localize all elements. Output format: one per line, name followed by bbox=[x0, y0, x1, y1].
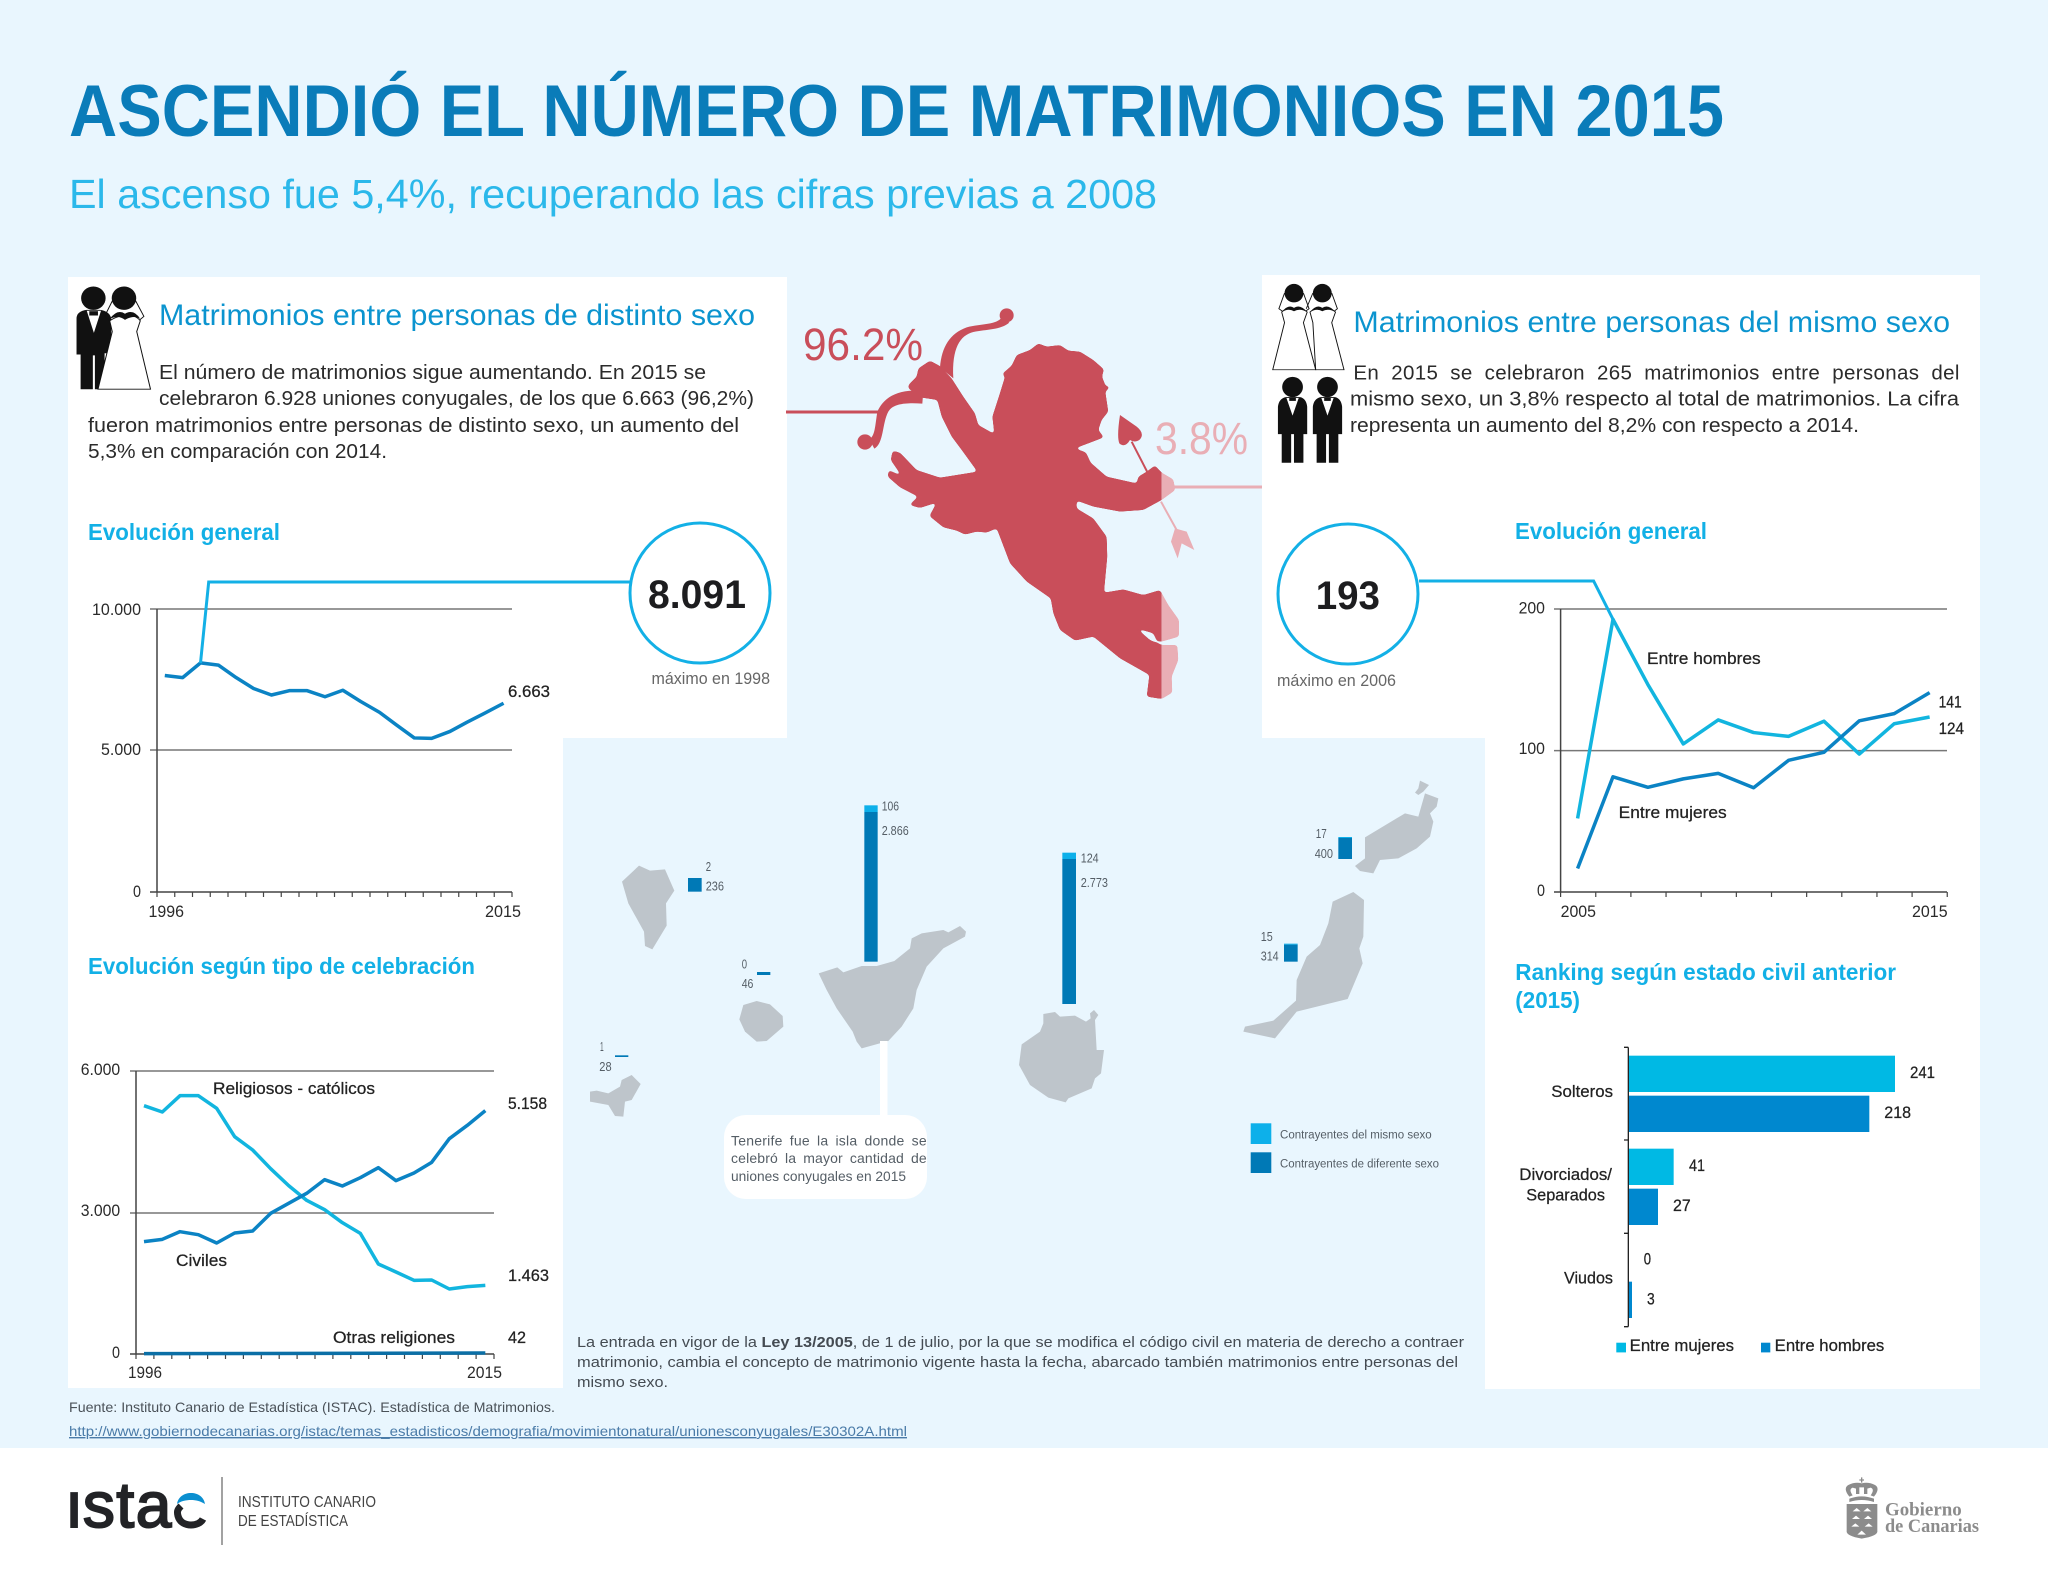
text block: Ley 13/2005: matrimonio, cambia el concepto de matrimonio vigente hasta la fecha, abarcado también matrimonios entre personas del bbox=[577, 1354, 1458, 1371]
island values: 46 bbox=[742, 977, 753, 991]
legend: ranking bbox=[1616, 1337, 1884, 1355]
text block: representa un aumento del 8,2% con respecto a 2014. bbox=[1350, 414, 1859, 437]
line chart: tipo de celebración: 0 bbox=[112, 1343, 120, 1362]
line chart: evolución general distinto sexo: 5.000 bbox=[101, 740, 141, 759]
text block: Ley 13/2005: La entrada en vigor de la Ley 13/2005 , de 1 de julio, por la que se modifica el código civil en materia de derecho a contraer bbox=[577, 1334, 1464, 1351]
text block: En 2015 se celebraron 265 matrimonios entre personas del bbox=[1353, 361, 1959, 384]
line chart: evolución general mismo sexo: Entre mujeres bbox=[1619, 804, 1727, 822]
footer band bbox=[0, 1448, 2048, 1586]
island values: 106 bbox=[882, 800, 899, 814]
line chart: evolución general distinto sexo: 10.000 bbox=[92, 600, 141, 619]
callout line and circle: máximo 2006: máximo en 2006 bbox=[1277, 671, 1396, 690]
line chart: evolución general mismo sexo: 124 bbox=[1939, 720, 1964, 738]
panel: matrimonios entre personas de distinto sexo bbox=[77, 286, 755, 463]
text block: mismo sexo, un 3,8% respecto al total de matrimonios. La cifra bbox=[1350, 388, 1960, 410]
line chart: evolución general mismo sexo: 2015 bbox=[1912, 902, 1948, 921]
panel: mismo sexo background bbox=[1262, 275, 1980, 1389]
bar chart: ranking estado civil: 0 bbox=[1644, 1251, 1651, 1269]
bar chart: ranking estado civil: 241 bbox=[1910, 1064, 1935, 1082]
logo: ISTAC bbox=[64, 1469, 376, 1545]
bar chart: ranking estado civil: 3 bbox=[1647, 1290, 1655, 1308]
legend: map: Contrayentes del mismo sexo bbox=[1280, 1129, 1432, 1141]
legend: ranking: Entre mujeres bbox=[1630, 1337, 1734, 1355]
line chart: tipo de celebración: 5.158 bbox=[508, 1095, 547, 1113]
bar chart: ranking estado civil: Separados bbox=[1526, 1187, 1605, 1205]
line chart: evolución general mismo sexo: 0 bbox=[1537, 881, 1545, 900]
island values: 17 bbox=[1316, 827, 1327, 841]
map: Canary Islands with bars bbox=[590, 781, 1438, 1117]
line chart: tipo de celebración: Otras religiones bbox=[333, 1329, 455, 1347]
source link: http://www.gobiernodecanarias.org/istac/temas_estadisticos/demografia/movimientonatural/unionesconyugales/E30302A.html bbox=[69, 1423, 907, 1439]
callout: Tenerife: celebró la mayor cantidad de bbox=[731, 1150, 927, 1166]
text block: fueron matrimonios entre personas de distinto sexo, un aumento del bbox=[88, 414, 739, 437]
text block: celebraron 6.928 uniones conyugales, de los que 6.663 (96,2%) bbox=[159, 387, 754, 410]
callout: Tenerife bbox=[724, 1041, 927, 1199]
central illustration: cupid with percentages bbox=[786, 308, 1262, 699]
panel: distinto sexo background bbox=[68, 277, 787, 1388]
line chart: tipo de celebración: Religiosos - católicos bbox=[213, 1080, 375, 1098]
island values: 1 bbox=[600, 1040, 604, 1054]
line chart: tipo de celebración: Civiles bbox=[176, 1252, 227, 1270]
line chart: evolución general mismo sexo: 100 bbox=[1519, 739, 1545, 758]
line chart: evolución general mismo sexo: 200 bbox=[1519, 598, 1545, 617]
line chart: tipo de celebración bbox=[81, 1060, 549, 1382]
text block: 5,3% en comparación con 2014. bbox=[88, 440, 387, 463]
island values: 15 bbox=[1261, 930, 1273, 944]
line chart: tipo de celebración: 2015 bbox=[467, 1363, 502, 1382]
logo: Gobierno de Canarias: Gobierno bbox=[1885, 1500, 1962, 1521]
callout line and circle: máximo 1998 bbox=[200, 523, 770, 688]
line chart: evolución general mismo sexo: Entre hombres bbox=[1647, 650, 1761, 668]
line chart: tipo de celebración: 1.463 bbox=[508, 1267, 549, 1285]
callout: Tenerife: uniones conyugales en 2015 bbox=[731, 1168, 906, 1184]
heading: evolución general (mismo sexo): Evolución general bbox=[1515, 518, 1707, 544]
island values: 314 bbox=[1261, 950, 1279, 964]
bar chart: ranking estado civil: 27 bbox=[1673, 1197, 1691, 1215]
line chart: evolución general mismo sexo: 2005 bbox=[1561, 902, 1596, 921]
heading: ranking según estado civil: Ranking según estado civil anterior bbox=[1515, 959, 1896, 985]
logo: Gobierno de Canarias: de Canarias bbox=[1885, 1516, 1979, 1537]
callout line and circle: máximo 1998: 8.091 bbox=[648, 573, 746, 617]
logo: ISTAC: istac bbox=[67, 1469, 205, 1541]
legend: map: Contrayentes de diferente sexo bbox=[1280, 1158, 1439, 1170]
line chart: evolución general distinto sexo bbox=[92, 600, 550, 921]
central illustration: cupid with percentages: 96.2% bbox=[803, 319, 923, 370]
text block: Ley 13/2005 bbox=[577, 1334, 1464, 1391]
line chart: tipo de celebración: 42 bbox=[508, 1329, 526, 1347]
bar chart: ranking estado civil: Viudos bbox=[1564, 1270, 1613, 1288]
bar chart: ranking estado civil: Solteros bbox=[1551, 1083, 1613, 1101]
logo: ISTAC: DE ESTADÍSTICA bbox=[238, 1511, 348, 1530]
line chart: tipo de celebración: 1996 bbox=[128, 1363, 162, 1382]
islands west bbox=[590, 805, 966, 1117]
logo: Gobierno de Canarias bbox=[1846, 1477, 1979, 1539]
line chart: evolución general mismo sexo: 141 bbox=[1939, 694, 1962, 712]
bar chart: ranking estado civil bbox=[1519, 1047, 1935, 1355]
heading: ranking según estado civil: (2015) bbox=[1515, 987, 1580, 1013]
callout line and circle: máximo 2006: 193 bbox=[1316, 574, 1380, 618]
text block bbox=[1350, 361, 1960, 437]
heading: evolución según tipo de celebración: Evolución según tipo de celebración bbox=[88, 953, 475, 979]
legend: map bbox=[1251, 1123, 1439, 1173]
callout line and circle: máximo 2006 bbox=[1277, 524, 1613, 690]
island values: 2.773 bbox=[1081, 876, 1108, 890]
heading: ranking según estado civil bbox=[1515, 959, 1896, 1013]
icon: two brides and two grooms bbox=[1273, 284, 1344, 463]
central illustration: cupid with percentages: 3.8% bbox=[1155, 413, 1248, 464]
island values: 236 bbox=[706, 880, 724, 894]
legend: ranking: Entre hombres bbox=[1775, 1337, 1884, 1355]
islands east bbox=[1019, 781, 1438, 1102]
line chart: tipo de celebración: 6.000 bbox=[81, 1060, 120, 1079]
bar chart: ranking estado civil: 41 bbox=[1689, 1157, 1705, 1175]
text block: Ley 13/2005: mismo sexo. bbox=[577, 1374, 668, 1391]
heading: Matrimonios entre personas de distinto sexo bbox=[159, 299, 755, 332]
line chart: evolución general distinto sexo: 0 bbox=[133, 882, 141, 901]
callout line and circle: máximo 1998: máximo en 1998 bbox=[652, 669, 770, 688]
island values: 2 bbox=[706, 860, 711, 874]
title: ASCENDIÓ EL NÚMERO DE MATRIMONIOS EN 2015 bbox=[69, 71, 1724, 152]
island values: 0 bbox=[742, 958, 747, 972]
text block: El número de matrimonios sigue aumentando. En 2015 se bbox=[159, 361, 706, 384]
line chart: evolución general distinto sexo: 6.663 bbox=[508, 683, 550, 701]
heading: evolución general (distinto sexo): Evolución general bbox=[88, 519, 280, 545]
bar chart: ranking estado civil: Divorciados/ bbox=[1519, 1166, 1612, 1184]
heading: Matrimonios entre personas del mismo sexo bbox=[1353, 306, 1950, 339]
line chart: evolución general mismo sexo bbox=[1519, 598, 1964, 921]
island values: 2.866 bbox=[882, 824, 909, 838]
panel: matrimonios entre personas del mismo sexo bbox=[1273, 284, 1960, 463]
island values: 28 bbox=[599, 1060, 612, 1074]
island values bbox=[599, 800, 1333, 1074]
logo: ISTAC: INSTITUTO CANARIO bbox=[238, 1494, 376, 1511]
island values: 124 bbox=[1081, 852, 1099, 866]
subtitle: El ascenso fue 5,4%, recuperando las cifras previas a 2008 bbox=[69, 171, 1157, 217]
bar chart: ranking estado civil: 218 bbox=[1884, 1104, 1911, 1122]
line chart: tipo de celebración: 3.000 bbox=[81, 1201, 120, 1220]
icon: groom and bride bbox=[77, 286, 151, 389]
text block bbox=[88, 361, 754, 463]
line chart: evolución general distinto sexo: 2015 bbox=[485, 902, 521, 921]
line chart: evolución general distinto sexo: 1996 bbox=[148, 902, 184, 921]
island values: 400 bbox=[1315, 847, 1333, 861]
callout: Tenerife: Tenerife fue la isla donde se bbox=[731, 1133, 927, 1149]
source note: Fuente: Instituto Canario de Estadística (ISTAC). Estadística de Matrimonios. bbox=[69, 1399, 555, 1415]
